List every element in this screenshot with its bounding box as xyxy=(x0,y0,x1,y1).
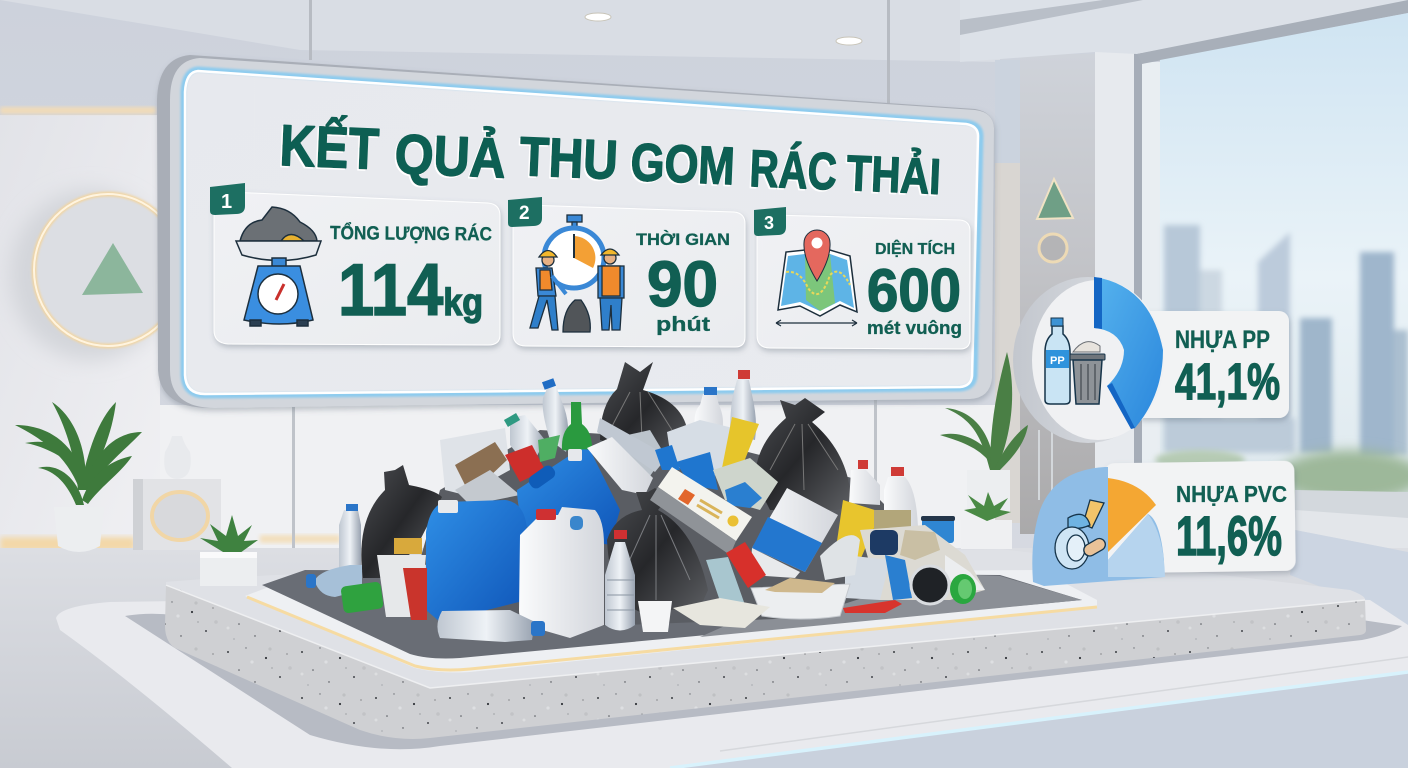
label: PVC plastic: NHỰA PVC xyxy=(1176,481,1287,507)
wall ring light and triangle xyxy=(10,190,182,360)
icon: plastic scraps xyxy=(1055,500,1108,569)
label: PP plastic: NHỰA PP xyxy=(1175,326,1270,354)
chart supports xyxy=(1038,430,1053,500)
title: THẢI xyxy=(846,145,942,205)
icon: stopwatch and two workers xyxy=(530,215,624,332)
badge 2 xyxy=(508,197,542,227)
icon: weighing scale with waste xyxy=(236,207,321,326)
white and blue cartons xyxy=(587,437,778,510)
label box xyxy=(650,467,752,555)
waste pile xyxy=(306,362,985,642)
big blue jerrycan xyxy=(426,500,527,622)
title: RÁC xyxy=(748,140,838,202)
ceiling lights and hanger rods xyxy=(292,0,890,575)
icon: folded map with pin xyxy=(776,230,857,326)
label: time: THỜI GIAN xyxy=(636,230,730,249)
segment: 41.1% xyxy=(1094,277,1163,428)
city window xyxy=(1155,13,1408,552)
title: QUẢ xyxy=(393,122,507,190)
white slab xyxy=(56,590,1408,768)
value: 41.1%: 41,1% xyxy=(1175,353,1280,410)
card 3: area xyxy=(754,207,970,349)
segment: 11.6% xyxy=(1108,478,1156,552)
unit: square metres: mét vuông xyxy=(867,318,962,338)
lying bottle xyxy=(437,610,545,642)
ceiling xyxy=(960,0,1408,62)
card 1: total waste xyxy=(210,183,500,345)
panel: PVC label card xyxy=(1104,461,1296,573)
granite display plinth xyxy=(165,549,1366,739)
badge 1 xyxy=(210,183,245,215)
left shelf decor: plant, vase and ring cube xyxy=(15,402,221,552)
panel: PP label card xyxy=(1135,311,1289,418)
cups and small bottle xyxy=(306,538,672,632)
chart: PVC share half disc xyxy=(1032,467,1165,586)
title xyxy=(278,113,942,205)
bottles on top xyxy=(504,370,756,470)
side wall xyxy=(995,60,1020,163)
value: 90: 90 xyxy=(647,248,718,320)
recess shadow around plinth xyxy=(125,614,1402,749)
white jerrycan xyxy=(519,507,604,638)
left black bag and bottle xyxy=(339,465,442,578)
value: 11.6%: 11,6% xyxy=(1176,504,1282,567)
main sign board xyxy=(157,55,994,408)
center black bag xyxy=(607,488,708,612)
badge 3 xyxy=(754,207,786,236)
label: total waste: TỔNG LƯỢNG RÁC xyxy=(330,222,492,245)
right-side mixed rubble xyxy=(820,525,985,613)
title: KẾT xyxy=(278,113,380,182)
value: 114 kg: 114kg xyxy=(338,250,483,331)
badge 3: 3 xyxy=(764,213,774,233)
card 2: time xyxy=(508,197,745,347)
badge 2: 2 xyxy=(519,203,530,224)
blue-white carton xyxy=(750,488,838,578)
title: THU xyxy=(518,125,619,191)
chart: PP share disc xyxy=(1013,277,1164,443)
title: GOM xyxy=(629,133,736,196)
red bottle and tray xyxy=(673,542,850,628)
tilted blue jug xyxy=(517,449,620,545)
value: 600: 600 xyxy=(867,257,961,324)
dark tray with glowing edge xyxy=(245,570,1097,672)
bag: right black xyxy=(755,398,850,510)
icon: trash bin xyxy=(1070,342,1105,404)
icon: PP bottle: PP xyxy=(1050,355,1065,367)
badge 1: 1 xyxy=(221,191,232,213)
small left succulent xyxy=(200,515,258,586)
floor and platform base xyxy=(0,530,1408,768)
icon: PP bottle xyxy=(1045,318,1070,404)
label: area: DIỆN TÍCH xyxy=(875,240,955,258)
right shelf decor: plant, triangle and ring xyxy=(921,179,1073,549)
standing clear bottle xyxy=(605,530,635,630)
unit: minutes: phút xyxy=(656,314,710,336)
right white gallons and yellow bottle xyxy=(835,460,918,565)
bag: upper black xyxy=(600,362,688,460)
plastic bag, yellow bottle and rear clutter xyxy=(440,417,759,505)
shadow mass behind pile xyxy=(420,430,950,630)
